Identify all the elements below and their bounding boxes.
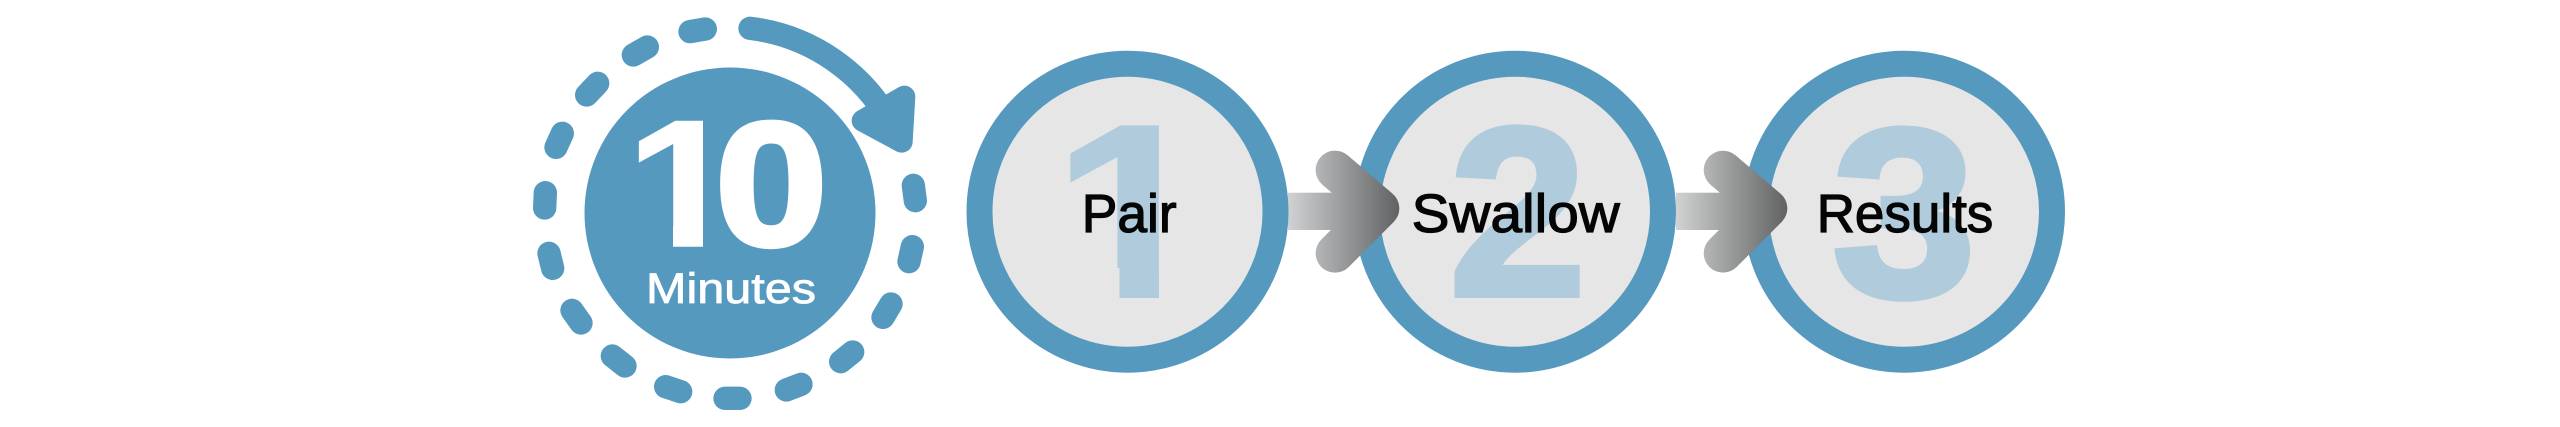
arrow 2 head overlapping step 3 (1723, 170, 1768, 253)
icon: clockwise arrow (750, 28, 904, 142)
arrow 2 (1676, 193, 1736, 230)
label: Minutes: Minutes (646, 265, 816, 313)
number 10 (638, 120, 822, 250)
timer badge: 10 minutes (545, 28, 915, 398)
label: Pair: Pair (1082, 184, 1177, 244)
badge circle (584, 68, 876, 358)
label: Swallow: Swallow (1412, 184, 1621, 244)
arrow 1 (1288, 170, 1380, 253)
ghost numeral 3: 3 (1832, 79, 1976, 347)
ghost numeral 2: 2 (1449, 77, 1586, 346)
ghost numeral 1: 1 (1052, 72, 1211, 350)
step 2 circle: Swallow (1367, 64, 1663, 360)
label: Results: Results (1817, 184, 1993, 244)
step 1 circle: Pair (980, 64, 1276, 360)
number 10: 1 (626, 83, 741, 285)
icon: dashed clock ring (545, 29, 915, 398)
number 10: 0 (715, 86, 828, 283)
arrow 1 head overlapping step 2 (1335, 170, 1380, 253)
step 3 circle: Results (1756, 64, 2052, 360)
